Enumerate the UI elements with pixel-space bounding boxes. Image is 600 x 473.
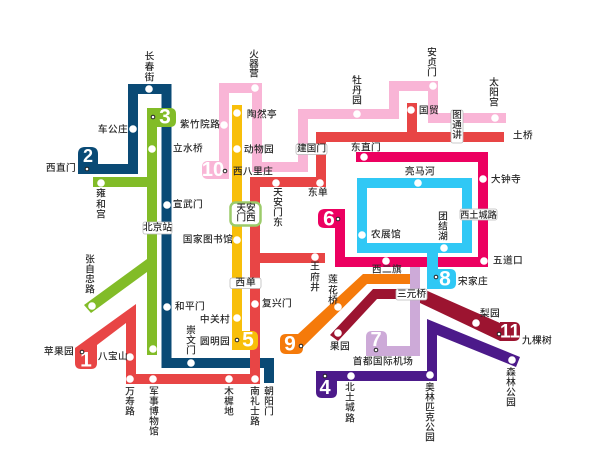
station names: vertical: 雍 bbox=[96, 186, 106, 200]
numeral 4: 4 bbox=[319, 377, 331, 399]
station names: vertical: 园 bbox=[425, 432, 435, 444]
station names: vertical: 文 bbox=[186, 334, 196, 346]
station names: vertical: 路 bbox=[125, 404, 135, 418]
station names: horizontal: 圆明园 bbox=[200, 336, 230, 348]
interchange label: vertical chip: 讲 bbox=[452, 128, 462, 141]
station names: vertical: 东 bbox=[273, 216, 283, 228]
numeral 6: 6 bbox=[323, 208, 335, 230]
station names: vertical: 门 bbox=[427, 66, 437, 78]
station names: vertical: 湖 bbox=[438, 230, 448, 242]
station names: horizontal: 八宝山 bbox=[98, 350, 128, 362]
station names: vertical: 路 bbox=[345, 412, 355, 424]
station names: horizontal: 宋家庄 bbox=[458, 274, 488, 288]
station names: vertical: 张 bbox=[85, 254, 95, 266]
station names: vertical: 土 bbox=[345, 390, 355, 404]
station names: vertical: 春 bbox=[145, 60, 155, 73]
station names: vertical: 事 bbox=[149, 394, 159, 408]
station names: vertical: 长 bbox=[145, 50, 155, 62]
station names: vertical: 营 bbox=[249, 66, 259, 80]
station names: vertical: 克 bbox=[425, 410, 435, 424]
station names: vertical: 忠 bbox=[85, 274, 95, 286]
station names: vertical: 城 bbox=[345, 402, 355, 414]
station names: vertical: 奥 bbox=[425, 380, 435, 394]
line 10: pink bbox=[202, 86, 506, 181]
station names: horizontal: 中关村 bbox=[200, 312, 230, 326]
station names: vertical: 军 bbox=[149, 386, 159, 398]
station names: horizontal: 亮马河 bbox=[405, 164, 435, 178]
stations: large white dots bbox=[88, 82, 516, 383]
station names: vertical: 匹 bbox=[425, 402, 435, 414]
station names: horizontal: 立水桥 bbox=[173, 142, 203, 154]
numeral 11: 11 bbox=[500, 322, 520, 342]
station names: vertical: 门 bbox=[264, 404, 274, 418]
station names: vertical: 北 bbox=[345, 382, 355, 394]
station names: vertical: 礼 bbox=[250, 394, 260, 408]
interchange label: vertical chip: 通 bbox=[452, 119, 462, 131]
station names: vertical: 器 bbox=[249, 58, 259, 70]
interchange label: 北京站: 北京站 bbox=[143, 220, 172, 234]
station names: vertical: 物 bbox=[149, 414, 159, 428]
station names: vertical: 团 bbox=[438, 210, 448, 222]
station names: vertical: 博 bbox=[149, 404, 159, 418]
station names: vertical: 公 bbox=[506, 388, 516, 398]
station names: horizontal: 车公庄 bbox=[98, 122, 128, 136]
station names: vertical: 路 bbox=[85, 282, 95, 296]
station names: horizontal: 梨园 bbox=[480, 306, 500, 320]
station names: horizontal: 紫竹院路 bbox=[180, 118, 220, 130]
line 6: magenta bbox=[318, 157, 483, 262]
station names: horizontal: 西二旗 bbox=[372, 262, 402, 276]
station names: vertical: 天 bbox=[273, 188, 283, 198]
station names: vertical: 桥 bbox=[328, 294, 338, 306]
station names: vertical: 路 bbox=[250, 414, 260, 428]
station names: vertical bbox=[85, 46, 516, 444]
numeral 8: 8 bbox=[439, 268, 451, 290]
interchange label: 西单: 西单 bbox=[235, 276, 257, 288]
station names: horizontal bbox=[44, 104, 552, 368]
station names: horizontal: 苹果园 bbox=[44, 344, 74, 358]
station names: horizontal: 国家图书馆 bbox=[183, 232, 233, 246]
station names: vertical: 园 bbox=[506, 396, 516, 408]
station names: vertical: 结 bbox=[438, 220, 448, 232]
station names: horizontal: 宣武门 bbox=[173, 198, 203, 210]
station names: vertical: 门 bbox=[186, 344, 196, 356]
station names: vertical: 士 bbox=[250, 404, 260, 418]
station names: horizontal: 果园 bbox=[330, 340, 350, 352]
station names: vertical: 莲 bbox=[328, 274, 338, 286]
station names: vertical: 贞 bbox=[427, 56, 437, 68]
numeral 9: 9 bbox=[284, 332, 296, 356]
station names: vertical: 安 bbox=[427, 46, 437, 58]
station names: horizontal: 国贸 bbox=[419, 104, 439, 116]
station names: vertical: 阳 bbox=[264, 396, 274, 408]
station names: horizontal: 首都国际机场 bbox=[353, 354, 413, 368]
line 3: green bbox=[84, 106, 176, 355]
station names: horizontal: 复兴门 bbox=[262, 296, 292, 310]
station names: horizontal: 和平门 bbox=[175, 300, 205, 312]
line 5: yellow bbox=[232, 105, 258, 352]
numeral 3: 3 bbox=[159, 106, 171, 128]
line 8: cyan bbox=[357, 178, 472, 290]
numeral 5: 5 bbox=[242, 328, 254, 352]
numeral 10: 10 bbox=[202, 159, 224, 181]
line 11: crimson bbox=[330, 289, 520, 342]
station names: vertical: 王 bbox=[310, 262, 320, 272]
station names: vertical: 园 bbox=[352, 94, 362, 106]
station names: horizontal: 西八里庄 bbox=[233, 164, 273, 178]
interchange label: 建国门: 建国门 bbox=[297, 142, 326, 154]
interchange label: 西土城路: 西土城路 bbox=[460, 209, 497, 220]
station names: vertical: 街 bbox=[145, 70, 155, 84]
station names: horizontal: 西直门 bbox=[46, 161, 76, 174]
station names: vertical: 万 bbox=[125, 386, 135, 398]
station names: horizontal: 东单 bbox=[308, 186, 328, 198]
station names: horizontal: 陶然亭 bbox=[247, 108, 277, 120]
station names: vertical: 馆 bbox=[149, 424, 159, 438]
interchange label: 天安门西: 门西 bbox=[236, 210, 256, 224]
station names: vertical: 南 bbox=[250, 384, 260, 398]
numeral 1: 1 bbox=[80, 348, 92, 372]
station names: vertical: 森 bbox=[506, 366, 516, 378]
station names: vertical: 火 bbox=[249, 50, 259, 60]
interchange label: vertical chip bbox=[451, 109, 463, 143]
station names: horizontal: 土桥 bbox=[513, 128, 533, 142]
line 1: red bbox=[75, 103, 504, 384]
interchange label: 三元桥: 三元桥 bbox=[397, 287, 426, 300]
station names: vertical: 花 bbox=[328, 284, 338, 296]
numeral 2: 2 bbox=[83, 146, 93, 166]
station names: vertical: 丹 bbox=[352, 84, 362, 96]
station names: horizontal: 大钟寺 bbox=[491, 172, 521, 186]
station names: vertical: 林 bbox=[425, 390, 435, 404]
station names: vertical: 门 bbox=[273, 206, 283, 218]
station names: vertical: 自 bbox=[85, 262, 95, 276]
station names: vertical: 和 bbox=[96, 198, 106, 210]
station names: vertical: 樨 bbox=[224, 394, 234, 408]
station names: vertical: 阳 bbox=[489, 86, 499, 98]
station names: vertical: 崇 bbox=[186, 324, 196, 336]
interchange label: 天安门西 bbox=[230, 201, 260, 226]
station names: vertical: 牡 bbox=[352, 74, 362, 86]
line 9: orange bbox=[280, 274, 410, 356]
interchange label: 西单 bbox=[230, 276, 261, 288]
station names: horizontal: 九棵树 bbox=[522, 334, 552, 346]
line 7: lilac bbox=[366, 267, 420, 356]
station names: vertical: 宫 bbox=[489, 96, 499, 108]
station names: vertical: 井 bbox=[310, 280, 320, 294]
station names: vertical: 寿 bbox=[125, 394, 135, 408]
station names: vertical: 木 bbox=[224, 384, 234, 398]
station names: vertical: 地 bbox=[224, 404, 234, 418]
station names: vertical: 朝 bbox=[264, 386, 274, 398]
station names: vertical: 太 bbox=[489, 76, 499, 88]
line 2: navy bbox=[78, 89, 269, 383]
station names: vertical: 宫 bbox=[96, 208, 106, 220]
station names: vertical: 府 bbox=[310, 270, 320, 284]
station names: horizontal: 五道口 bbox=[493, 254, 523, 266]
interchange label: vertical chip: 图 bbox=[452, 109, 462, 121]
interchange label: 天安门西: 天安 bbox=[236, 201, 256, 214]
station names: horizontal: 动物园 bbox=[244, 142, 274, 156]
station names: horizontal: 农展馆 bbox=[371, 228, 401, 240]
numeral 7: 7 bbox=[370, 329, 382, 351]
stations: terminal small dots bbox=[80, 115, 501, 378]
station names: vertical: 林 bbox=[506, 376, 516, 388]
station names: vertical: 公 bbox=[425, 422, 435, 434]
station names: vertical: 安 bbox=[273, 196, 283, 208]
station names: horizontal: 东直门 bbox=[351, 140, 381, 154]
line 4: purple bbox=[316, 319, 520, 399]
